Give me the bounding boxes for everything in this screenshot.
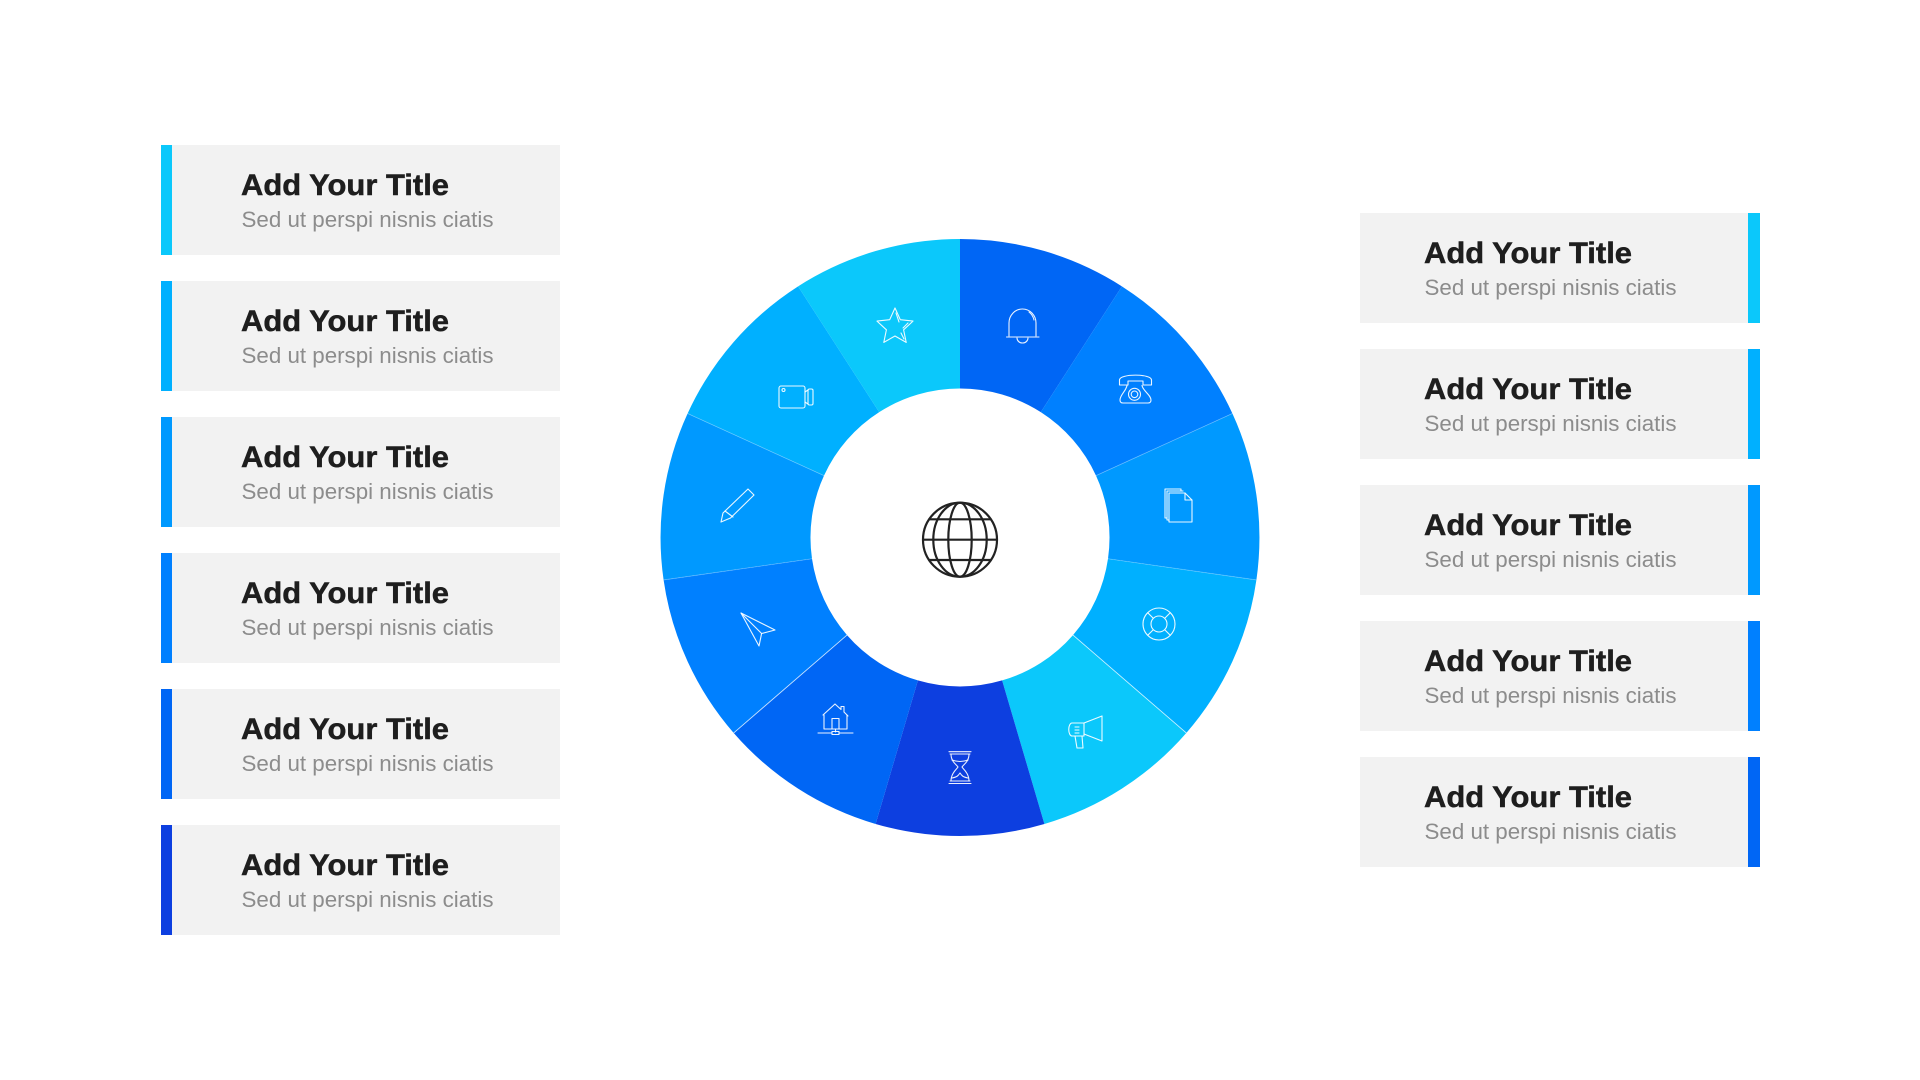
icon: pencil [721, 489, 754, 522]
segment: phone [1041, 286, 1232, 476]
right column of cards [1360, 213, 1760, 867]
left card 2: Add Your Title [241, 305, 449, 338]
right card 2 [1360, 349, 1760, 459]
right card 3: Sed ut perspi nisnis ciatis [1424, 547, 1676, 572]
right card 3 [1360, 485, 1760, 595]
segment: megaphone [1002, 635, 1186, 824]
segment: life ring [1073, 559, 1256, 733]
left card 4 [161, 553, 560, 663]
right card 1 [1360, 213, 1760, 323]
left card 5: Add Your Title [241, 713, 449, 746]
donut wheel [661, 239, 1259, 836]
segment: house [734, 635, 918, 824]
left card 6 [161, 825, 560, 935]
segment: video camera [688, 286, 879, 476]
left card 4: Sed ut perspi nisnis ciatis [242, 615, 494, 640]
left card 3: Sed ut perspi nisnis ciatis [242, 479, 494, 504]
left card 3 [161, 417, 560, 527]
icon: megaphone [1069, 716, 1102, 748]
right card 5 [1360, 757, 1760, 867]
segment: paper plane [664, 559, 847, 733]
segment: bell [960, 239, 1122, 412]
icon: life ring [1143, 608, 1175, 640]
icon: telephone [1120, 375, 1152, 403]
segment: pencil [661, 414, 824, 580]
segment: star [798, 239, 960, 412]
icon: documents [1165, 489, 1192, 522]
right card 5: Add Your Title [1424, 781, 1632, 814]
right card 2: Sed ut perspi nisnis ciatis [1424, 411, 1676, 436]
segment: hourglass [876, 680, 1044, 836]
right card 1: Sed ut perspi nisnis ciatis [1424, 275, 1676, 300]
icon: star [877, 308, 913, 342]
right card 5: Sed ut perspi nisnis ciatis [1424, 819, 1676, 844]
icon: hourglass [949, 752, 971, 784]
right card 4: Sed ut perspi nisnis ciatis [1424, 683, 1676, 708]
right card 1: Add Your Title [1424, 237, 1632, 270]
segment: documents [1096, 414, 1259, 580]
right card 4: Add Your Title [1424, 645, 1632, 678]
wheel segments [661, 239, 1259, 836]
icon: paper plane [741, 613, 775, 646]
icon: house [818, 704, 853, 734]
right card 4 [1360, 621, 1760, 731]
left card 1 [161, 145, 560, 255]
left column of cards [161, 145, 560, 935]
left card 2 [161, 281, 560, 391]
left card 4: Add Your Title [241, 577, 449, 610]
left card 2: Sed ut perspi nisnis ciatis [242, 343, 494, 368]
left card 6: Add Your Title [241, 849, 449, 882]
icon: video camera [779, 386, 813, 408]
left card 5: Sed ut perspi nisnis ciatis [242, 751, 494, 776]
right card 3: Add Your Title [1424, 509, 1632, 542]
left card 1: Add Your Title [241, 169, 449, 202]
right card 2: Add Your Title [1424, 373, 1632, 406]
left card 5 [161, 689, 560, 799]
left card 1: Sed ut perspi nisnis ciatis [242, 207, 494, 232]
left card 3: Add Your Title [241, 441, 449, 474]
icon: bell [1006, 309, 1039, 343]
left card 6: Sed ut perspi nisnis ciatis [242, 887, 494, 912]
icon: globe [923, 503, 997, 577]
